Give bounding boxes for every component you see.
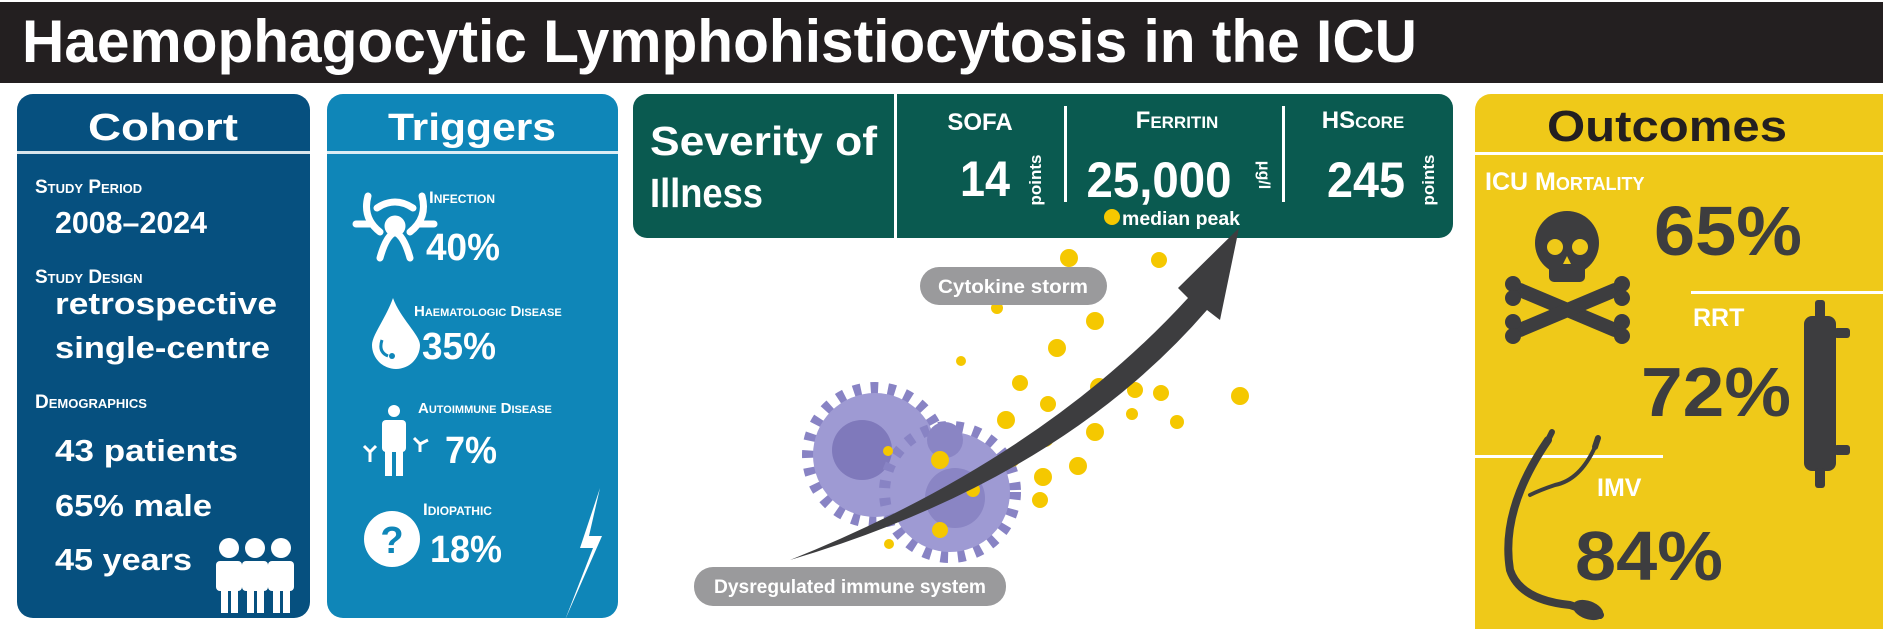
panel: triggers (327, 94, 618, 620)
stat: ferritin (1086, 107, 1272, 230)
panel: severity of illness (633, 94, 1453, 238)
stat: ferritin: Ferritin (1136, 107, 1218, 134)
icon: people (216, 538, 294, 613)
heading: severity: Illness (650, 170, 763, 216)
text: IMV: IMV (1597, 474, 1642, 502)
icon: question: ? (380, 520, 404, 562)
stat: sofa (947, 109, 1045, 207)
heading: cohort: Cohort (88, 107, 238, 149)
text block: study details: Study Period (35, 177, 142, 198)
callout: cytokine storm (920, 267, 1107, 305)
stat: hscore: points (1419, 154, 1438, 206)
callout: dysregulated immune system: Dysregulated immune system (714, 577, 986, 598)
icon: haemofilter (1804, 300, 1850, 488)
text block: study details: retrospective (55, 286, 277, 321)
text: RRT: RRT (1693, 304, 1744, 332)
text block: study details: Study Design (35, 267, 143, 288)
text block: study details: 43 patients (55, 433, 238, 468)
yellow cytokine dots (883, 249, 1249, 549)
callout: dysregulated immune system (694, 567, 1006, 606)
stat: IMV: 84% (1575, 517, 1723, 595)
stat: sofa: SOFA (947, 109, 1013, 136)
heading: severity: Severity of (650, 118, 877, 164)
stat: ferritin: 25,000 (1086, 152, 1232, 208)
text block: study details: single-centre (55, 330, 270, 365)
icon: lightning (565, 488, 602, 620)
heading: triggers: Triggers (388, 107, 556, 149)
callout: cytokine storm: Cytokine storm (938, 277, 1088, 298)
stat: mortality: 65% (1654, 192, 1802, 270)
stat: hscore: HScore (1322, 107, 1404, 134)
panel: outcomes (1475, 94, 1883, 629)
text: autoimmune: 7% (445, 430, 497, 472)
heading: outcomes: Outcomes (1547, 102, 1787, 151)
text block: study details: 2008–2024 (55, 205, 208, 240)
text: idiopathic: Idiopathic (423, 500, 492, 519)
stat: RRT: 72% (1641, 353, 1791, 431)
stat: ferritin: median peak (1122, 209, 1240, 230)
title bar (0, 2, 1883, 83)
heading: severity (650, 118, 877, 216)
text: idiopathic (423, 500, 502, 571)
text: haematologic: Haematologic Disease (414, 303, 562, 320)
panel: cohort (17, 94, 310, 618)
icon: biohazard (356, 196, 434, 258)
text: autoimmune: Autoimmune Disease (418, 400, 552, 417)
text block: study details: 45 years (55, 542, 192, 577)
icon: skull and crossbones (1505, 211, 1630, 344)
text block: study details: 65% male (55, 488, 212, 523)
text: autoimmune (418, 400, 552, 472)
stat: sofa: 14 (960, 151, 1010, 207)
text: haematologic: 35% (422, 326, 496, 368)
text block: study details: Demographics (35, 392, 147, 413)
illustration: immune cells (813, 393, 1010, 552)
stat: hscore: 245 (1327, 152, 1405, 208)
title bar: Haemophagocytic Lymphohistiocytosis in the ICU (22, 8, 1417, 75)
text: ICU mortality: ICU Mortality (1485, 168, 1644, 196)
text: haematologic (414, 303, 562, 368)
icon: question (364, 511, 420, 567)
arrow: rising cytokine storm (790, 228, 1239, 560)
icon: endotracheal tube (1508, 432, 1606, 624)
stat: ferritin: μg/l (1255, 161, 1272, 189)
text: infection: 40% (426, 227, 500, 269)
text: idiopathic: 18% (430, 529, 502, 571)
icon: person with antibodies (364, 405, 428, 476)
stat: hscore (1322, 107, 1438, 208)
stat: sofa: points (1026, 154, 1045, 206)
icon: drop (372, 298, 420, 369)
text block: study details (35, 177, 277, 577)
text: infection (426, 188, 500, 269)
text: infection: Infection (429, 188, 495, 207)
